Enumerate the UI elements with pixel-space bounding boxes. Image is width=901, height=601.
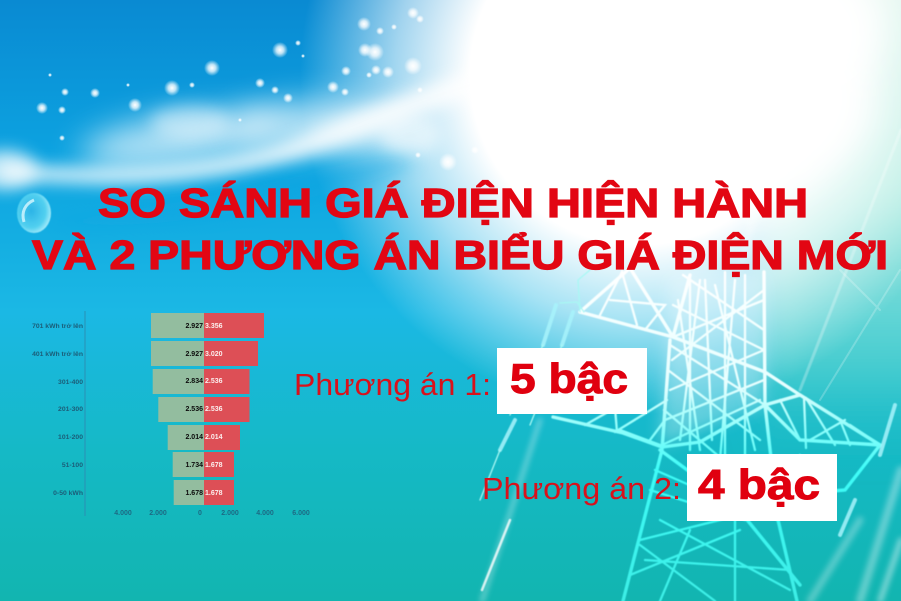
chart value axis labels: 2.000 bbox=[149, 510, 167, 517]
chart row labels: 401 kWh trở lên bbox=[32, 351, 83, 358]
chart left values: 2.014 bbox=[185, 434, 203, 441]
background sparkles bbox=[36, 7, 479, 171]
option 1 value: 5 bậc bbox=[510, 355, 628, 402]
chart left values: 2.927 bbox=[185, 323, 203, 330]
chart right values: 2.014 bbox=[205, 434, 223, 441]
option 2 bbox=[482, 454, 837, 521]
icon: water bubble bbox=[17, 193, 51, 233]
option 1 value box bbox=[497, 348, 647, 414]
tower insulators bbox=[500, 305, 895, 535]
tower lattice bbox=[585, 272, 880, 601]
background light glow bbox=[0, 0, 901, 460]
chart value axis labels bbox=[114, 510, 310, 517]
chart axis bbox=[84, 311, 86, 516]
chart left values: 1.734 bbox=[185, 462, 203, 469]
chart left values: 2.927 bbox=[185, 351, 203, 358]
chart row labels: 101-200 bbox=[58, 434, 83, 441]
chart right values: 3.356 bbox=[205, 323, 223, 330]
illustration: transmission tower bbox=[480, 268, 895, 601]
option 2 value box bbox=[687, 454, 837, 521]
option 2 value: 4 bậc bbox=[698, 461, 820, 508]
chart value axis labels: 2.000 bbox=[221, 510, 239, 517]
chart right bars: proposed prices bbox=[204, 313, 264, 505]
chart left bars: current prices bbox=[151, 313, 204, 505]
chart right values: 1.678 bbox=[205, 490, 223, 497]
chart row labels: 201-300 bbox=[58, 406, 83, 413]
chart value axis labels: 6.000 bbox=[292, 510, 310, 517]
chart row labels bbox=[32, 323, 83, 497]
option 1 label: Phương án 1: bbox=[294, 367, 491, 402]
chart row labels: 301-400 bbox=[58, 379, 83, 386]
chart value axis labels: 4.000 bbox=[256, 510, 274, 517]
bar chart: electricity price comparison bbox=[32, 311, 310, 517]
chart value axis labels: 0 bbox=[198, 510, 202, 517]
chart value axis labels: 4.000 bbox=[114, 510, 132, 517]
chart right values: 1.678 bbox=[205, 462, 223, 469]
title bbox=[32, 180, 888, 278]
chart left values: 2.536 bbox=[185, 406, 203, 413]
option 1 bbox=[294, 348, 647, 414]
title line 2: VÀ 2 PHƯƠNG ÁN BIỂU GIÁ ĐIỆN MỚI bbox=[32, 231, 888, 278]
chart left values: 1.678 bbox=[185, 490, 203, 497]
tower body haze bbox=[660, 275, 765, 445]
chart left values: 2.834 bbox=[185, 378, 203, 385]
chart right values: 3.020 bbox=[205, 351, 223, 358]
chart right values bbox=[205, 323, 223, 497]
chart left values bbox=[185, 323, 203, 497]
chart row labels: 0-50 kWh bbox=[53, 490, 83, 497]
background diagonal light beams bbox=[482, 130, 901, 601]
title line 1: SO SÁNH GIÁ ĐIỆN HIỆN HÀNH bbox=[98, 180, 808, 226]
chart right values: 2.536 bbox=[205, 406, 223, 413]
tower main structure bbox=[553, 268, 880, 601]
background clouds and light swoosh bbox=[0, 0, 825, 290]
chart row labels: 51-100 bbox=[62, 462, 83, 469]
option 2 label: Phương án 2: bbox=[482, 471, 681, 506]
chart right values: 2.536 bbox=[205, 378, 223, 385]
chart row labels: 701 kWh trở lên bbox=[32, 323, 83, 330]
